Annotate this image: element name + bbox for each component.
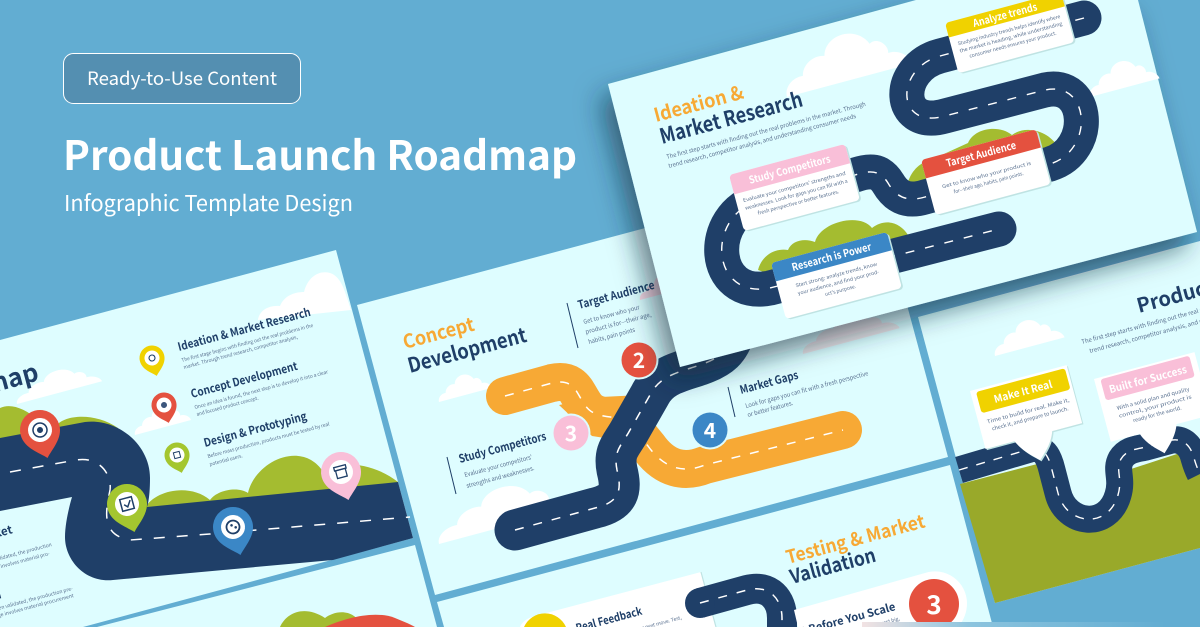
number 3 <box>909 579 959 627</box>
step: market fragment <box>0 521 53 574</box>
yellow circle <box>524 613 566 627</box>
text: target audience: habits, pain points <box>587 325 636 346</box>
card: research is power: Research is Power <box>790 239 873 275</box>
card: built for success: control, your product is <box>1118 393 1193 420</box>
number 2: 2 <box>633 345 645 375</box>
cloud: beside heading <box>11 360 102 404</box>
badge: ready-to-use content <box>64 54 300 104</box>
card: study competitors: weaknesses. Look for gaps you can fill with a <box>744 178 849 212</box>
red shape <box>325 615 415 627</box>
step: concept development: Concept Development <box>189 358 299 402</box>
text: market gaps: Look for gaps you can fit with a fresh perspective <box>744 368 870 410</box>
pin: blue palette <box>209 503 260 560</box>
text: target audience: Target Audience <box>576 277 657 313</box>
number 3: 3 <box>565 418 577 448</box>
card: research is power: uct's purpose. <box>824 283 857 298</box>
text: market gaps: or better features. <box>746 398 794 419</box>
text: study competitors <box>457 428 548 490</box>
step: design and prototyping: Design & Prototyping <box>202 408 309 451</box>
card: built for success <box>1094 352 1200 466</box>
subtitle: Infographic Template Design <box>64 186 353 218</box>
orange road <box>505 382 843 469</box>
text: real feedback <box>574 603 683 627</box>
pin: green checklist <box>103 480 154 537</box>
card: study competitors: fresh perspective or better features. <box>757 188 841 217</box>
pin: small yellow <box>137 343 169 379</box>
card: make it real: check it, and prepare to launch. <box>991 404 1070 432</box>
text: study competitors: strengths and weaknesses. <box>465 463 535 490</box>
text: study competitors: Study Competitors <box>457 428 548 467</box>
road <box>722 18 1084 289</box>
panel: production slide <box>918 241 1200 603</box>
cloud <box>988 312 1065 356</box>
card: study competitors <box>729 144 862 232</box>
text: target audience: product is for—their age, <box>584 310 652 336</box>
card: study competitors: Study Competitors <box>747 151 832 188</box>
card: analyze trends: Studying industry trends helps identify where <box>957 13 1061 47</box>
text: target audience: Get to know who your <box>582 302 641 326</box>
panel: testing and market validation slide <box>437 465 993 627</box>
hills <box>280 611 362 627</box>
pin: red target <box>16 406 67 463</box>
rule: study competitors <box>447 457 456 494</box>
title: Product Launch Roadmap <box>63 123 577 182</box>
step: ideation and market research: The first stage begins with finding out the real problems in the <box>181 322 314 364</box>
rule: panel edge <box>701 572 716 627</box>
step: ideation and market research: market. Through trend research, competitor analysis, <box>183 333 299 371</box>
number 3: 3 <box>926 585 942 622</box>
cloud: top right <box>258 272 351 320</box>
cloud: left <box>434 368 492 402</box>
card: analyze trends: consumer needs ensures your product. <box>969 29 1058 60</box>
step: ideation and market research <box>176 304 314 371</box>
badge: ready-to-use content: Ready-to-Use Content <box>87 65 277 91</box>
white scale panel <box>794 571 967 627</box>
card: target audience <box>921 129 1053 217</box>
rule: market gaps <box>728 387 735 417</box>
step: ideation and market research: Ideation & Market Research <box>176 304 312 355</box>
road <box>0 422 413 580</box>
card: make it real: Time to build for real. Make it, <box>986 396 1071 426</box>
step: concept development: Once an idea is found, the next step is to develop it into a clear <box>194 368 329 411</box>
heading: Concept <box>400 310 477 355</box>
text: target audience <box>576 277 657 346</box>
step: design and prototyping: Before mass production, products must be tested by real <box>207 420 331 460</box>
pin: pink box <box>317 448 368 505</box>
card: study competitors: Evaluate your competitors' strengths and <box>742 170 846 204</box>
heading: Market Research <box>656 84 806 151</box>
cloud: lower <box>429 470 574 544</box>
card: make it real: Make It Real <box>992 377 1055 407</box>
card: make it real <box>970 365 1090 475</box>
card: target audience: Get to know who your product is <box>941 160 1033 190</box>
cloud: shaded <box>796 303 900 354</box>
number 4 <box>690 410 730 450</box>
hills: behind upper road <box>0 406 118 445</box>
intro text: trend research, competitor analysis, and understanding consumer needs <box>667 111 857 170</box>
panel: ideation and market research slide <box>608 0 1197 367</box>
panel: concept development slide <box>357 168 948 595</box>
cloud: right <box>1083 53 1160 97</box>
white feedback panel <box>520 572 716 627</box>
hills: behind target card <box>908 129 1058 195</box>
navy road <box>515 330 735 530</box>
panel: lower left slide <box>97 545 437 627</box>
cloud: large <box>775 19 913 97</box>
text: market gaps: Market Gaps <box>738 367 800 398</box>
hills: behind lower road <box>145 456 398 530</box>
cloud: small middle <box>130 400 191 435</box>
number 3 <box>552 414 590 452</box>
card: built for success: Built for Success <box>1107 362 1189 397</box>
panel: roadmap overview slide <box>0 250 413 627</box>
heading: Validation <box>785 539 879 590</box>
cloud: shaded top <box>635 269 688 300</box>
number 2 <box>620 340 658 380</box>
step: design and prototyping: potential users. <box>209 452 244 468</box>
card: built for success: ready for the world. <box>1132 404 1183 424</box>
text: study competitors: Evaluate your competitors' <box>463 452 533 479</box>
step: concept development: and focused product concept. <box>196 394 260 418</box>
card: research is power <box>771 232 904 320</box>
road <box>685 588 782 627</box>
card: target audience: for—their age, habits, pain points. <box>953 170 1025 195</box>
card: analyze trends <box>945 0 1076 75</box>
card: target audience: Target Audience <box>944 138 1018 171</box>
hills: behind research card <box>758 220 908 285</box>
step: concept development <box>189 358 329 418</box>
card: built for success: With a solid plan and quality <box>1116 386 1191 412</box>
heading: Testing & Market <box>783 508 928 570</box>
card: research is power: Start strong: analyze trends, know <box>795 261 878 289</box>
number 4: 4 <box>704 415 716 445</box>
pin: small green <box>162 440 194 476</box>
rule: target audience <box>567 303 578 348</box>
card: research is power: your audience, and find your prod- <box>797 268 880 297</box>
step: design and prototyping <box>202 408 331 468</box>
bottom fade strip <box>862 622 1166 627</box>
pin: small red <box>149 390 181 426</box>
heading: Ideation & <box>651 78 746 128</box>
ground <box>960 453 1200 603</box>
card: analyze trends: the market is heading, while understanding <box>959 20 1063 55</box>
road <box>959 440 1200 519</box>
heading: Development <box>404 318 530 379</box>
intro text: The first step starts with finding out the real problems in the market. Through <box>665 99 867 161</box>
